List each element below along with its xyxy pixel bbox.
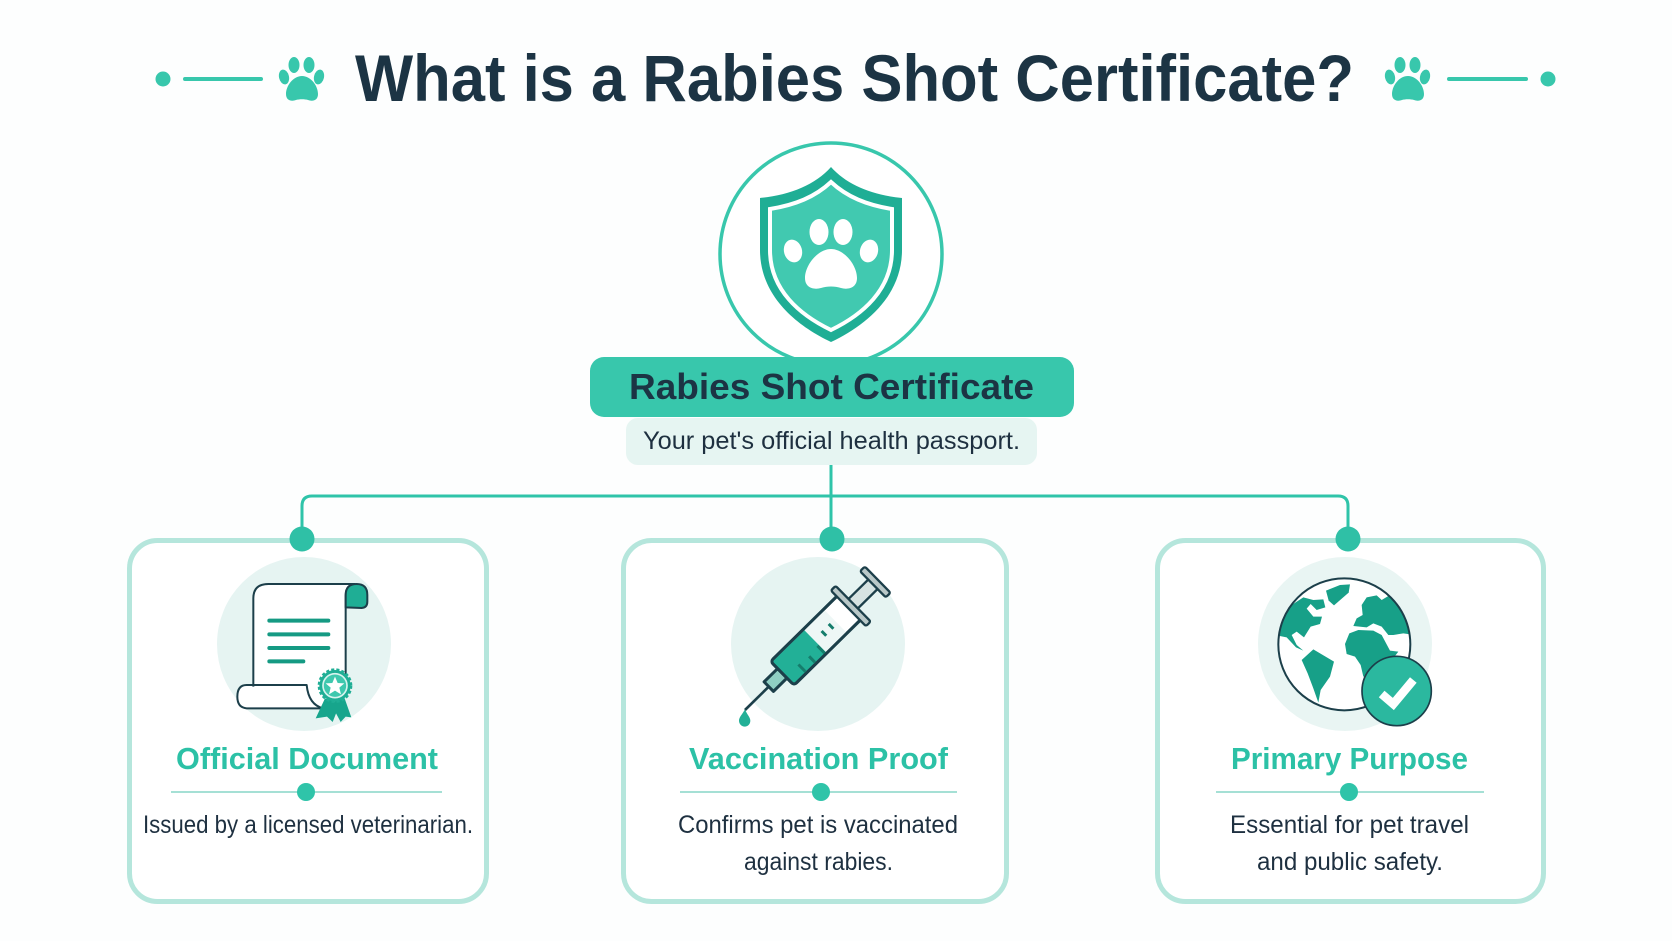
description: against rabies. bbox=[744, 848, 893, 876]
divider bbox=[171, 783, 442, 801]
description: Issued by a licensed veterinarian. bbox=[143, 811, 473, 839]
description bbox=[1230, 811, 1469, 876]
heading: Official Document bbox=[176, 741, 438, 776]
banner: Rabies Shot Certificate bbox=[590, 357, 1074, 417]
divider bbox=[1216, 783, 1484, 801]
icon: scroll with seal bbox=[217, 557, 391, 731]
connector node bbox=[1336, 526, 1360, 552]
icon: shield with paw in circle bbox=[720, 143, 942, 365]
description: Confirms pet is vaccinated bbox=[678, 811, 958, 839]
divider bbox=[680, 783, 957, 801]
panel: Official Document bbox=[130, 526, 486, 902]
description bbox=[678, 811, 958, 876]
icon: globe with check bbox=[1258, 557, 1432, 731]
banner: Rabies Shot Certificate: Rabies Shot Certificate bbox=[629, 366, 1034, 407]
panel: Primary Purpose bbox=[1158, 526, 1544, 902]
heading: Primary Purpose bbox=[1231, 741, 1468, 776]
header ornament: right bbox=[1384, 57, 1556, 101]
connector node bbox=[290, 526, 314, 552]
heading: Vaccination Proof bbox=[689, 741, 949, 776]
description: Essential for pet travel bbox=[1230, 811, 1469, 839]
title: What is a Rabies Shot Certificate? bbox=[355, 41, 1354, 115]
description: and public safety. bbox=[1257, 848, 1443, 876]
icon: syringe bbox=[727, 557, 905, 731]
panel: Vaccination Proof bbox=[624, 526, 1006, 902]
subtitle pill bbox=[626, 418, 1037, 465]
header ornament: left bbox=[156, 57, 325, 101]
connector lines bbox=[302, 465, 1348, 528]
subtitle pill: Your pet's official health passport. bbox=[643, 427, 1020, 455]
connector node bbox=[820, 526, 844, 552]
